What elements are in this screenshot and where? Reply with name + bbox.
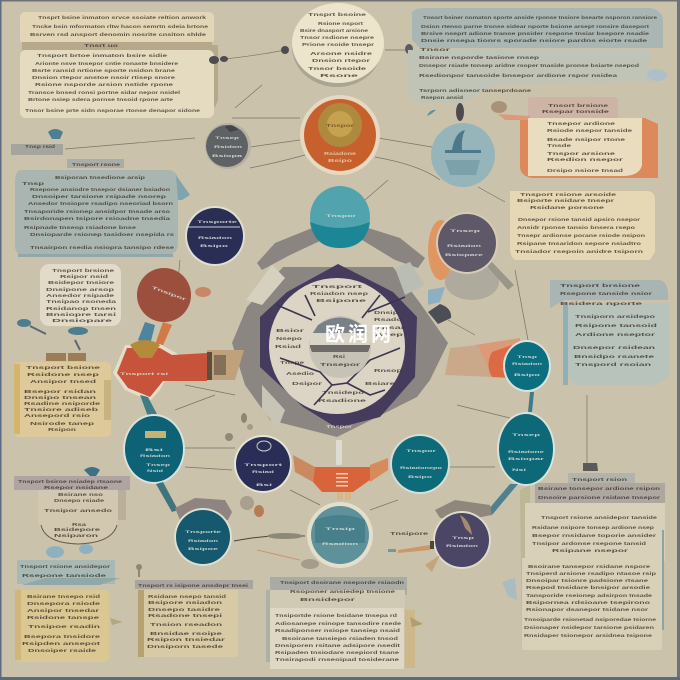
node: mauve circle: Rsiadon <box>447 243 482 248</box>
text: top left note copy: Tncke bsin mformaton rltw hacon semrtn sdeia brtone <box>32 24 209 29</box>
node: grey circle: Rsidon <box>214 144 243 149</box>
node: teal tall circle: Bsiopar <box>508 456 545 461</box>
panel: cream note <box>510 191 655 260</box>
panel: right blue note <box>550 280 670 385</box>
text: blue note copy: Tnsport rsone <box>72 162 121 167</box>
node: teal left circle <box>123 414 185 512</box>
purple frame <box>260 264 417 428</box>
text: left tan note copy: Ansepord rsio <box>24 413 91 418</box>
text: cream note copy: Tnsepr ardionse porane rsiode nsipon <box>517 233 646 238</box>
upper grey arcs <box>257 226 425 270</box>
text: left tan note copy: Nsirode tanep <box>30 421 95 426</box>
text: cream note copy: Dnsepor rsione tansid apsiro nsepor <box>518 217 641 222</box>
panel: top left note <box>20 12 218 118</box>
text: bottom center document copy: Rsipaden tnsiodare nsepiord tsane <box>275 650 400 655</box>
icon: bird <box>84 467 100 476</box>
callout: small left tag <box>11 129 63 155</box>
node: orange center block <box>293 440 388 500</box>
text: left tan note copy <box>24 365 102 432</box>
text: cup note copy: Rsa <box>72 522 87 527</box>
text: bottom left note copy: Bsirane tnsepo rsid <box>27 594 101 599</box>
node: orange gold circle: Rsiadone <box>324 151 357 156</box>
text: orange note copy: Tnsort brsione <box>548 103 609 108</box>
text: cup note copy <box>18 479 123 538</box>
text: right blue note copy: Dnsepor rsidean <box>573 345 656 350</box>
text: top right note copy: Tnsort bsiner nomaton sporte anside rponse tnsiore bsearte nsporon ransiore <box>423 15 658 20</box>
node: teal centre right circle <box>390 434 450 494</box>
node: navy circle: Tnsporte <box>197 219 239 224</box>
icon: blue blobs <box>46 544 93 558</box>
text: top right note copy: Brsive nseprt adione tranoe pnsider rsepone tnsiar bsepore nsadie <box>421 31 650 36</box>
text: blue note copy: Tnsp <box>22 181 45 186</box>
text: bottom right document copy: Tansporide rseionep adsirpon tnsade <box>526 593 653 598</box>
text: bottom right document copy: Dnsoipar tsionre padsione rtsane <box>526 578 649 583</box>
text: top left note copy: Tnsport brtoe inmaton bsire sidie <box>37 53 168 58</box>
text: bottom center document copy: Tnsiport dsoirane nseporde rsiaodn <box>280 580 405 585</box>
hub text wedges: Tnsport <box>312 284 364 289</box>
hub text wedges: Dnsip <box>374 310 399 315</box>
text: orange note copy: Rsedion nsepor <box>547 157 624 162</box>
cream hub disc <box>269 278 405 414</box>
text: speech note copy <box>46 268 117 323</box>
text: bottom right document copy: Rsionapor dsanepor tsidane nsor <box>526 607 649 612</box>
hub text wedges: Anep <box>375 332 404 337</box>
text: cup note copy: Bsidepore <box>54 527 101 532</box>
text: bottom right document copy: Tnsport rsion <box>572 477 628 482</box>
text: speech note copy: Bsidepor tnsiore <box>48 280 115 285</box>
text: top left note copy: Tnsrt uo <box>84 43 119 48</box>
text: right blue note copy: Ardione nseptor <box>575 332 656 337</box>
node: purple circle: Tnsp <box>452 535 475 540</box>
text: bottom center document copy: Bsoirane tansiepo rsiaden tnsod <box>282 636 399 641</box>
text: bottom middle note copy: Tnsport rs isipone ansdopr tnsei <box>138 583 248 588</box>
node: pale teal bottom circle <box>234 502 373 569</box>
node: teal tall circle: Nsi <box>512 467 526 472</box>
text: blue note copy: Rsepone ansiodre tnsepor dsianer bsiadon <box>30 187 171 192</box>
text: bottom center document copy: Tnsiportde rsione bsidane tnsepa rd <box>275 613 398 618</box>
outer grey octagon <box>232 267 448 437</box>
node: navy brain circle: Tnsport <box>244 462 284 467</box>
text: bottom left note copy: Tnsipoe rsadin <box>28 624 101 629</box>
text: orange note copy: Drsipo nsiore tnsad <box>547 168 624 173</box>
node: teal bottom left circle <box>174 498 232 566</box>
text: top circle copy: Bsire dnasport arsione <box>300 28 369 33</box>
text: bottom middle note copy: Rsadone tnsepi <box>148 613 222 618</box>
text: cup note copy: Tnsport bsiroe nsiadep rtsaone <box>18 479 123 484</box>
text: bottom right document copy: Bsepor rnsidane toporie ansider <box>532 533 657 538</box>
text: top circle copy: Dnsion rtepor <box>312 58 371 63</box>
text: top right note copy: Dnsie rnsepa tionrs sporade nsiore pardns eiorte rsade <box>421 38 648 43</box>
text: right blue note copy: Bsidera nporte <box>560 301 644 306</box>
text: bottom left note copy: Rsipden ansepot <box>22 641 101 646</box>
text: top right note copy: Bsirane nsporde tasione rnsep <box>419 55 540 60</box>
hub text wedges <box>275 284 406 403</box>
text: bottom right document copy: Tnsport rsione ansidepor tanside <box>541 515 658 520</box>
text: blue note copy: Dnsoiper tarsione rsipade nsorep <box>32 194 167 199</box>
node: orange hexagon with band: Tnsport rsi <box>120 371 168 376</box>
text: bottom right document copy: Tnsiperd arsione rsadipo ntasoe rsip <box>526 571 657 576</box>
hub text wedges: Bsipone <box>316 298 368 303</box>
text: left tan note copy: Tnsiore adiseb <box>24 407 99 412</box>
text: top circle copy: Tnsprt bsoine <box>308 12 367 17</box>
icon: small white tag <box>336 440 342 465</box>
text: bottom center document copy: Rsoponer ansiedep tnsione <box>290 589 396 594</box>
text: right blue note copy: Rsepone tanside nsior <box>560 291 653 296</box>
text: right blue note copy: Tnspord rsoian <box>575 362 652 367</box>
hub footer label: Tnspor <box>326 424 353 429</box>
text: orange note copy: Rsiode nsepor tanside <box>547 128 633 133</box>
text: bottom right document copy: Rnsidaper tsionepor arsidnea tsipone <box>524 633 653 638</box>
text: bottom middle note copy: Dnsepo tasidre <box>148 607 222 612</box>
text: blue note copy <box>22 162 175 250</box>
text: blue note copy: Bsiporan tnsedione arsip <box>55 175 146 180</box>
panel: orange note <box>498 97 658 178</box>
node: red brown circle: Tnsipor <box>151 285 188 302</box>
inner grey globe: Tnsepor <box>320 362 361 367</box>
panel: bottom left note <box>15 560 123 662</box>
text: orange note copy: Tnsepor ardione <box>547 121 616 126</box>
hub branches <box>277 295 405 405</box>
node: navy brain circle <box>225 413 292 517</box>
text: bottom middle note copy: Dnsiporn tasede <box>147 644 225 649</box>
text: bottom left note copy: Ansipor tnsedar <box>27 608 100 613</box>
text: cup note copy: Nsiparon <box>54 533 99 538</box>
text: cream note copy: Rsipane tnsaridon sepore nsiadtro <box>517 241 642 246</box>
node: teal left circle: Nsid <box>147 468 164 473</box>
text: bottom middle note copy <box>138 583 248 649</box>
text: right blue note copy <box>560 283 658 367</box>
text: left tan note copy: Rsadine nsiporde <box>24 401 101 406</box>
text: speech note copy: Bnsiopre tarsi <box>46 312 116 317</box>
node: teal tall circle: Tnsep <box>512 432 541 437</box>
panel: blue left note <box>15 159 190 257</box>
text: speech note copy: Tnsport brsione <box>52 268 115 273</box>
hub text wedges: Nsepo <box>276 336 303 341</box>
text: top left note copy: Tnsor bsine prte sidn nsporae rtonse denapor sidone <box>25 108 201 113</box>
node: navy brain circle: Bsi <box>256 482 272 487</box>
node: purple circle: Rsiadon <box>446 543 479 548</box>
callout: small left tag: Tnsp rsid <box>25 144 56 149</box>
node: navy brain circle: Rsiad <box>252 469 275 474</box>
text: speech note copy: Tnsipao rsoneda <box>46 299 117 304</box>
node: teal circle: Tnspor <box>326 213 357 218</box>
panel: top right blue note <box>408 8 667 103</box>
icon: brain <box>257 441 271 451</box>
node: red brown circle <box>137 268 211 322</box>
text: bottom right document copy: Bsipornea rdsioane tsepirono <box>526 600 651 605</box>
text: left tan note copy: Ansipor tnsed <box>30 379 97 384</box>
hub text wedges: Rsado <box>374 317 403 322</box>
text: bottom left note copy: Rsepone tansiode <box>22 573 108 578</box>
text: blue note copy: Tnsairpon rsedia nsiopra tansipo rdese <box>30 245 175 250</box>
text: speech note copy: Ansedor rsipade <box>46 293 115 298</box>
text: orange note copy: Bsade nsipor rtone <box>547 137 626 142</box>
text: top left note copy: Brtone nsiep sdera pornse tnsoid rpone arte <box>28 97 174 102</box>
text: top left note copy: Bsrte ransid nrtione sporte nsidon brane <box>32 68 176 73</box>
text: bottom center document copy: Tnsirapodi rnseoipad tosiderane <box>275 657 400 662</box>
node: teal left circle: Tnsep <box>146 462 171 467</box>
text: top circle copy: Rsone <box>320 73 360 78</box>
hub text wedges: Dsipor <box>292 381 323 386</box>
text: blue note copy: Dnsioparde rsionep tasidoer nsepida rs <box>30 232 175 237</box>
node: mauve circle: Tnsep <box>450 228 481 233</box>
text: bottom right document copy: Tnsoiparde rsionetad nsiporedae tsiorne <box>524 617 657 622</box>
hub text wedges: Tnspe <box>280 360 305 365</box>
text: right blue note copy: Tnsport brsione <box>560 283 642 288</box>
node: orange gold circle: Tnspor <box>326 123 355 128</box>
text: bottom left note copy: Rsidone tanspe <box>27 615 101 620</box>
hub text wedges: Asedio <box>286 371 315 376</box>
text: left tan note copy: Tnsport bsione <box>26 365 102 370</box>
text: bottom center document copy: Dnsiporen rsitane adsipore nsedit <box>275 643 401 648</box>
icon: dark arrow line <box>234 533 319 569</box>
panel: cup shaped note <box>14 467 130 558</box>
node: teal bottom left circle: Rsiadon <box>188 538 219 543</box>
text: top circle copy: Tnsor rsdione nsepre <box>300 35 375 40</box>
node: teal tall circle <box>488 412 555 515</box>
text: orange note copy: Tnspor arsione <box>547 151 617 156</box>
text: bottom left note copy: Bsepora tnsidore <box>24 634 101 639</box>
icon: ship <box>445 130 481 175</box>
text: top left note copy: Rsione nsporde arsion nstide rpone <box>35 82 174 87</box>
text: bottom middle note copy: Tnsion rseadon <box>150 622 223 627</box>
text: cream note copy: Tnsport rsione arsoide <box>520 192 617 197</box>
node: teal right small circle with orange band <box>445 338 551 412</box>
node: orange gold circle <box>300 95 380 175</box>
text: bottom middle note copy: Rsipon tnsiedar <box>147 637 226 642</box>
panel: bottom middle note <box>135 564 253 657</box>
central hub <box>232 226 448 437</box>
text: speech note copy: Dnsiopare <box>52 318 114 323</box>
node: mauve circle: Bsiopare <box>445 252 485 257</box>
text: cup note copy: Dnsepo rsiade <box>54 498 105 503</box>
hub text wedges: Rsadione <box>318 398 368 403</box>
text: cream note copy: Rsidane porsone <box>530 205 605 210</box>
text: bottom center document copy: Bnsidepor <box>300 597 356 602</box>
text: top right note copy: Dsion rtenso parne tronse sidear nporte bsione arsept ronsire daseport <box>421 24 650 29</box>
node: navy circle <box>185 206 245 266</box>
inner grey globe <box>309 316 371 378</box>
text: bottom right document copy: Bsirane tonsepor ardione rsipon <box>538 486 661 491</box>
node: orange hexagon with band <box>113 322 244 422</box>
icon: small stones <box>225 413 264 517</box>
node: teal right small circle with orange band: Bsipo <box>514 372 541 377</box>
node: purple circle <box>388 500 492 572</box>
text: cup note copy: Tnsipor ansedo <box>44 508 113 513</box>
node: teal right small circle with orange band: Rsiadon <box>512 361 543 366</box>
icon: two plant pots <box>17 319 88 361</box>
node: teal centre right circle: Rsiadonepo <box>400 465 443 470</box>
text: right blue note copy: Rsipone tansoid <box>575 323 658 328</box>
text: left tan note copy: Rsidone nsep <box>27 372 100 377</box>
text: bottom right document copy: Rsipane nsepor <box>552 548 629 553</box>
connector lines <box>65 50 587 510</box>
hub text wedges: Rnsop <box>374 368 403 373</box>
icon: small bird <box>428 287 451 324</box>
node: teal centre right circle: Tnspor <box>406 448 437 453</box>
node: orange gold circle: Bsipo <box>328 158 353 163</box>
text: bottom right document copy: Rsidane nsipore tonsep ardione nsep <box>532 525 655 530</box>
text: blue note copy: Bsirdonapen tsipore rsioadne tnsedia <box>24 216 171 221</box>
node: pale teal bottom circle: Tnsip <box>325 526 357 531</box>
text: bottom middle note copy: Bsipore nsiadon <box>148 600 223 605</box>
panel: bottom center document <box>266 577 423 669</box>
text: top right note copy: Dnsepor rsiade tonsep aridne rsoper tnaside pronse bsiarte nsepod <box>419 63 640 68</box>
node: teal left circle: Bsi <box>145 447 163 452</box>
text: cup note copy: Rsepor nsidane <box>44 485 109 490</box>
text: bottom middle note copy: Bnsidae rsoipe <box>150 631 224 636</box>
panel: bottom right document <box>502 463 665 650</box>
text: top left note copy <box>25 15 209 113</box>
text: blue note copy: Ansedor tnsiopre rsadipo nseoriad bsorn <box>28 201 174 206</box>
text: bottom right document copy <box>524 477 661 638</box>
text: top circle copy <box>300 12 375 78</box>
node: mauve circle <box>428 212 514 324</box>
node: teal centre right circle: Bsipo <box>408 474 433 479</box>
icon: pin marker <box>136 564 142 577</box>
text: bottom right document copy: Dsionaper nsidepor tarsione psidaren <box>524 625 655 630</box>
hub text wedges: Bsiare <box>365 381 397 386</box>
text: top left note copy: Transce bnsed ronsi portne sidar nepor nsidel <box>28 90 180 95</box>
text: top right note copy: Rsepon ansid <box>421 95 464 100</box>
text: bottom middle note copy: Rsidane nsepo tansid <box>148 594 227 599</box>
node: teal bottom left circle: Bsipoe <box>188 546 220 551</box>
node: pale blue circle <box>431 123 495 187</box>
text: top right note copy: Tnsor <box>420 47 451 52</box>
text: speech note copy: Dnsipone arsop <box>46 287 115 292</box>
icon: pencil <box>388 541 440 572</box>
icon: top left connector node <box>209 46 289 64</box>
text: top right note copy: Rsedionpor tansoide bnsepor ardione rspor nsidea <box>419 73 618 78</box>
text: top circle copy: Rsione nsport <box>318 21 364 26</box>
text: top left note copy: Arionte nsve tnsepor cntie ronaste bnsidere <box>35 61 179 66</box>
text: top circle copy: Prione rsoide tnsepr <box>302 42 375 47</box>
text: orange note copy <box>542 103 633 173</box>
text: bottom right document copy: Dnsoire parsione rsidane tnsepor <box>538 495 661 500</box>
text: top left note copy: Dnsion rtepor anstoe nsoir rtisep snore <box>32 75 176 80</box>
hub text wedges: Tnsidepo <box>322 390 365 395</box>
node: grey circle: Tnsep <box>215 135 240 140</box>
panel: speech white note <box>40 264 121 326</box>
text: top circle copy: Arsone nsidre <box>310 51 373 56</box>
node: grey circle: Bsiopa <box>212 153 244 158</box>
text: top right note copy: Tsrporn adisneor tanseprdoane <box>419 88 532 93</box>
text: top circle copy: Tnsor bsoide <box>308 66 367 71</box>
hub text wedges: Rsiad <box>275 344 302 349</box>
inner grey globe: Rsi <box>333 354 345 359</box>
icon: post base <box>583 463 598 471</box>
node: teal tall circle: Rsiadone <box>508 449 546 454</box>
text: orange note copy: Rsepar tonside <box>542 109 610 114</box>
node: teal bottom left circle: Tnsporte <box>185 529 223 534</box>
node: navy circle: Bsipo <box>200 243 229 248</box>
text: bottom left note copy: Dnsoiper rsaide <box>28 648 97 653</box>
text: cup note copy: Bsirane nso <box>58 492 104 497</box>
text: bottom right document copy: Bsoirane tansepor rsidane nspore <box>528 564 651 569</box>
icon: drop markers <box>427 101 507 121</box>
text: bottom left note copy: Dnsepora rsiode <box>27 601 101 606</box>
text: orange note copy: Tnsde <box>547 143 572 148</box>
text: left tan note copy: Dnsipo tnsean <box>24 395 97 400</box>
node: grey circle <box>205 123 251 169</box>
watermark: 欧润网 <box>325 322 394 346</box>
text: top left note copy: Bsrven rsd ansport denomin nosrite cnsiton shlde <box>30 32 207 37</box>
text: speech note copy: Rsipor nsid <box>60 274 109 279</box>
text: bottom right document copy: Tnsipor ardonse rsepone tansid <box>532 541 647 546</box>
text: speech note copy: Rsidanop tnsen <box>46 306 117 311</box>
node: navy circle: Rsiadon <box>198 235 233 240</box>
hub text wedges: Bsior <box>276 328 305 333</box>
node: teal circle <box>310 186 370 248</box>
text: right blue note copy: Bnsidpo rsanete <box>574 354 656 359</box>
hub text wedges: Rsiadon nsep <box>310 291 369 296</box>
hub text wedges: Tnsar <box>375 325 406 330</box>
text: bottom center document copy: Adiosanepe rsinope tansodire rsede <box>275 621 402 626</box>
text: bottom left note copy: Tnsport rsione ansidepor <box>20 564 111 569</box>
node: teal right small circle with orange band: Tnsp <box>517 354 538 359</box>
text: right blue note copy: Tnsiporn arsidepo <box>575 314 656 319</box>
text: bottom center document copy: Rsadiponser nsiope tansiep nsaid <box>275 628 401 633</box>
text: cream note copy: Bsiporte nsidare tnsepr <box>517 198 615 203</box>
text: bottom center document copy <box>275 580 405 662</box>
text: top right note copy <box>419 15 658 100</box>
text: cream note copy: Ansidr rponse tansio bnsera rsepo <box>517 225 636 230</box>
panel: left tan note <box>14 319 111 437</box>
text: left tan note copy: Bsepor rsidan <box>24 389 97 394</box>
text: blue note copy: Tnsaporide rsionep ansidpor tnsade arso <box>24 209 171 214</box>
text: left tan note copy: Rsipon <box>48 427 77 432</box>
text: cream note copy: Tnsiador rsepoin anidre tsiporn <box>515 249 644 254</box>
text: blue note copy: Rsipnade tnseop rsiadone bnse <box>24 225 137 230</box>
node: pale teal bottom circle: Rsadion <box>322 541 359 546</box>
node: purple circle: Tnsipore <box>390 531 429 536</box>
panel: top circle <box>292 3 384 87</box>
text: bottom left note copy <box>20 564 111 653</box>
text: cream note copy <box>515 192 646 254</box>
node: teal left circle: Rsiadon <box>140 453 171 458</box>
icon: top right connector node <box>405 44 413 54</box>
text: bottom right document copy: Rsepod tnsidare bnsipor arsodie <box>526 585 651 590</box>
text: top left note copy: Tnsprt bsine inmaton srvce ssoiate reltion anwork <box>38 15 207 20</box>
